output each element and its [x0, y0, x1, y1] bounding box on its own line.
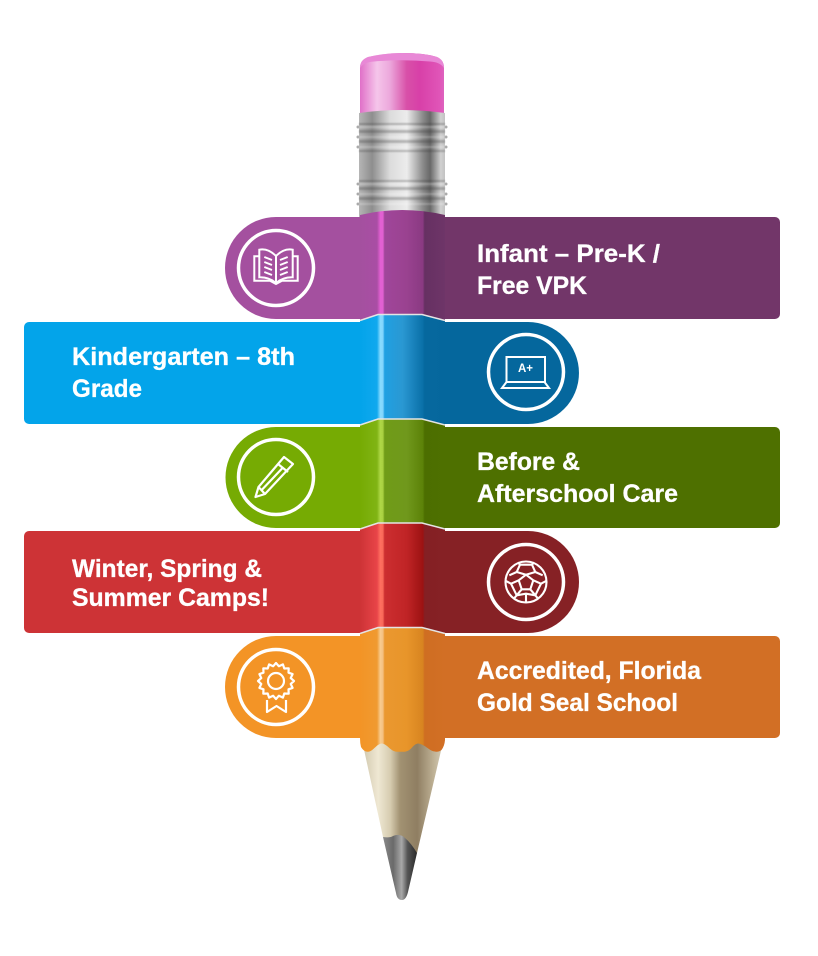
- label: Kindergarten to 8th Grade: Grade: [72, 375, 142, 403]
- icon: laptop with A+: A+: [518, 363, 533, 375]
- label: Infant to Pre-K: Free VPK: [477, 272, 587, 300]
- row 1: purple ribbon, left cap: [225, 217, 361, 319]
- label: Winter, Spring and Summer Camps: Winter, Spring &: [72, 555, 262, 583]
- icon: award ribbon seal: [238, 650, 314, 724]
- label: Before and Afterschool Care: Afterschool Care: [477, 480, 678, 508]
- label: Winter, Spring and Summer Camps: [72, 555, 269, 612]
- row 4: red ribbon, left panel: [24, 531, 361, 633]
- label: Before and Afterschool Care: Before &: [477, 448, 580, 476]
- label: Infant to Pre-K: [477, 240, 660, 300]
- icon: laptop with A+: [488, 334, 564, 410]
- label: Before and Afterschool Care: [477, 448, 678, 508]
- row 5: orange ribbon, left cap: [225, 636, 361, 738]
- pencil lead: [383, 835, 417, 900]
- pencil body: purple band: [360, 210, 445, 330]
- label: Kindergarten to 8th Grade: Kindergarten – 8th: [72, 343, 295, 371]
- label: Accredited, Florida Gold Seal School: [477, 657, 702, 717]
- row 5: orange ribbon, right panel: [444, 636, 780, 738]
- label: Infant to Pre-K: Infant – Pre-K /: [477, 240, 660, 268]
- row 2: blue ribbon, right cap: [444, 322, 579, 424]
- row 2: blue ribbon, left panel: [24, 322, 361, 424]
- row 3: green ribbon, left cap: [225, 427, 361, 528]
- pencil body: blue band: [360, 314, 445, 430]
- row 3: green ribbon, right panel: [444, 427, 780, 528]
- eraser: [360, 53, 444, 118]
- pencil body: green band: [360, 419, 445, 535]
- label: Winter, Spring and Summer Camps: Summer Camps!: [72, 584, 269, 612]
- pencil wood tip: [362, 738, 444, 853]
- row 1: purple ribbon, right panel: [444, 217, 780, 319]
- icon: pencil: [238, 440, 314, 514]
- row 4: red ribbon, right cap: [444, 531, 579, 633]
- metal ferrule: [356, 110, 448, 218]
- pencil body: orange band with scalloped edge: [360, 628, 445, 752]
- label: Accredited, Florida Gold Seal School: Gold Seal School: [477, 689, 678, 717]
- label: Accredited, Florida Gold Seal School: Accredited, Florida: [477, 657, 702, 685]
- icon: soccer ball: [488, 544, 564, 620]
- pencil body: red band: [360, 523, 445, 640]
- label: Kindergarten to 8th Grade: [72, 343, 295, 403]
- icon: open book: [238, 230, 314, 306]
